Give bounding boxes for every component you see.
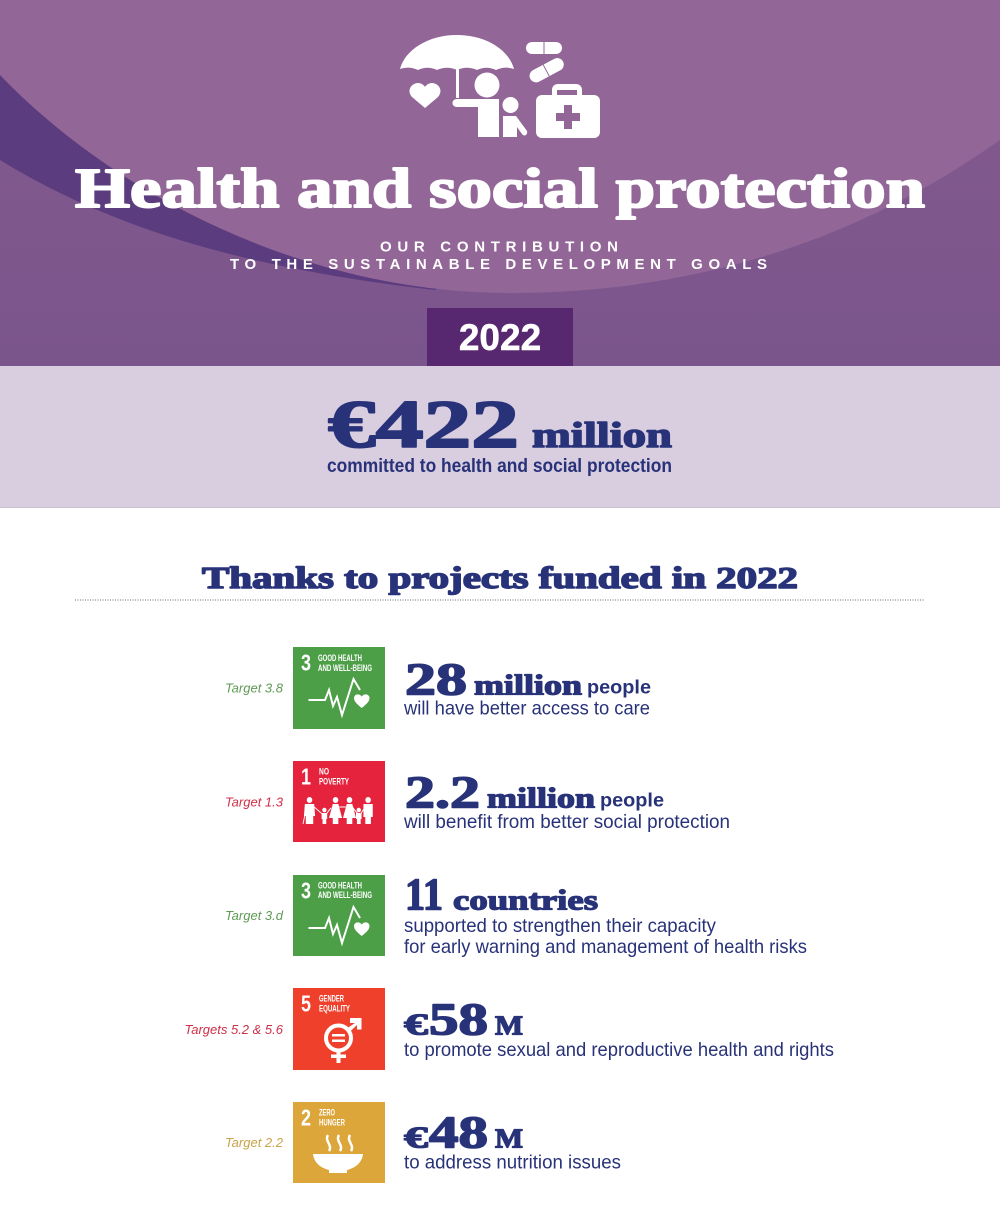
- subtitle: TO THE SUSTAINABLE DEVELOPMENT GOALS: [230, 256, 767, 273]
- row: target 2.2: M: [495, 1124, 523, 1154]
- SDG 1 tile: NO: [319, 766, 329, 778]
- description: to promote sexual and reproductive health and rights: [404, 1039, 834, 1061]
- icon: umbrella, people, pills and medical bag: [400, 35, 600, 138]
- SDG 2 tile: HUNGER: [319, 1118, 345, 1128]
- target label: Target 3.d: [225, 908, 284, 923]
- row: target 3.8: million: [474, 670, 582, 702]
- section heading: Thanks to projects funded in 2022: [202, 560, 798, 595]
- target label: Target 1.3: [225, 794, 284, 810]
- row: target 3.d: [225, 870, 807, 958]
- SDG 3 tile: AND WELL-BEING: [318, 663, 372, 674]
- row: targets 5.2 and 5.6: M: [495, 1010, 523, 1040]
- statistic: 28: [405, 654, 467, 704]
- description: supported to strengthen their capacity: [404, 915, 716, 937]
- row: targets 5.2 and 5.6: [184, 988, 834, 1070]
- row: target 1.3: people: [600, 790, 664, 812]
- SDG 2 tile: 2: [301, 1104, 311, 1130]
- SDG 5 tile: 5: [301, 990, 311, 1016]
- year badge: [427, 308, 573, 366]
- description: to address nutrition issues: [404, 1152, 621, 1174]
- SDG 3 tile: [293, 647, 385, 729]
- SDG 1 tile: POVERTY: [319, 776, 349, 788]
- row: target 1.3: [225, 761, 730, 842]
- title: Health and social protection: [75, 158, 925, 220]
- header banner: [0, 0, 1000, 366]
- panel: total commitment: [0, 366, 1000, 508]
- SDG 5 tile: [293, 988, 385, 1070]
- SDG 3 tile: [293, 875, 385, 956]
- statistic: 11: [405, 870, 443, 920]
- row: target 2.2: 48: [429, 1106, 488, 1158]
- row: target 3.8: [225, 647, 651, 729]
- SDG 5 tile: EQUALITY: [319, 1004, 350, 1014]
- SDG 2 tile: [293, 1102, 385, 1183]
- row: target 1.3: million: [487, 782, 595, 814]
- SDG 3 tile: AND WELL-BEING: [318, 890, 372, 901]
- row: target 3.d: countries: [453, 884, 598, 916]
- target label: Target 3.8: [225, 680, 284, 696]
- year badge: 2022: [459, 317, 541, 358]
- row: target 3.d: for early warning and management of health risks: [404, 936, 807, 958]
- statistic: €: [404, 1006, 429, 1042]
- SDG 3 tile: 3: [301, 650, 311, 676]
- total amount: €422: [328, 386, 519, 462]
- row: target 3.8: people: [587, 676, 651, 698]
- subtitle: OUR CONTRIBUTION: [380, 238, 618, 256]
- SDG 3 tile: 3: [301, 878, 311, 904]
- SDG 5 tile: GENDER: [319, 994, 344, 1004]
- description: will benefit from better social protection: [403, 811, 730, 833]
- statistic: €: [404, 1120, 429, 1154]
- SDG 3 tile: GOOD HEALTH: [318, 880, 362, 892]
- target label: Target 2.2: [225, 1135, 284, 1150]
- commitment caption: committed to health and social protection: [327, 456, 672, 477]
- row: target 2.2: [225, 1102, 621, 1183]
- SDG 1 tile: 1: [301, 764, 311, 790]
- row: targets 5.2 and 5.6: 58: [429, 994, 488, 1044]
- statistic: 2.2: [405, 766, 480, 818]
- SDG 2 tile: ZERO: [319, 1108, 335, 1118]
- target label: Targets 5.2 & 5.6: [184, 1022, 284, 1037]
- SDG 1 tile: [293, 761, 385, 842]
- description: will have better access to care: [403, 698, 650, 720]
- SDG 3 tile: GOOD HEALTH: [318, 653, 362, 664]
- subtitle: [230, 238, 767, 273]
- million label: million: [532, 415, 672, 455]
